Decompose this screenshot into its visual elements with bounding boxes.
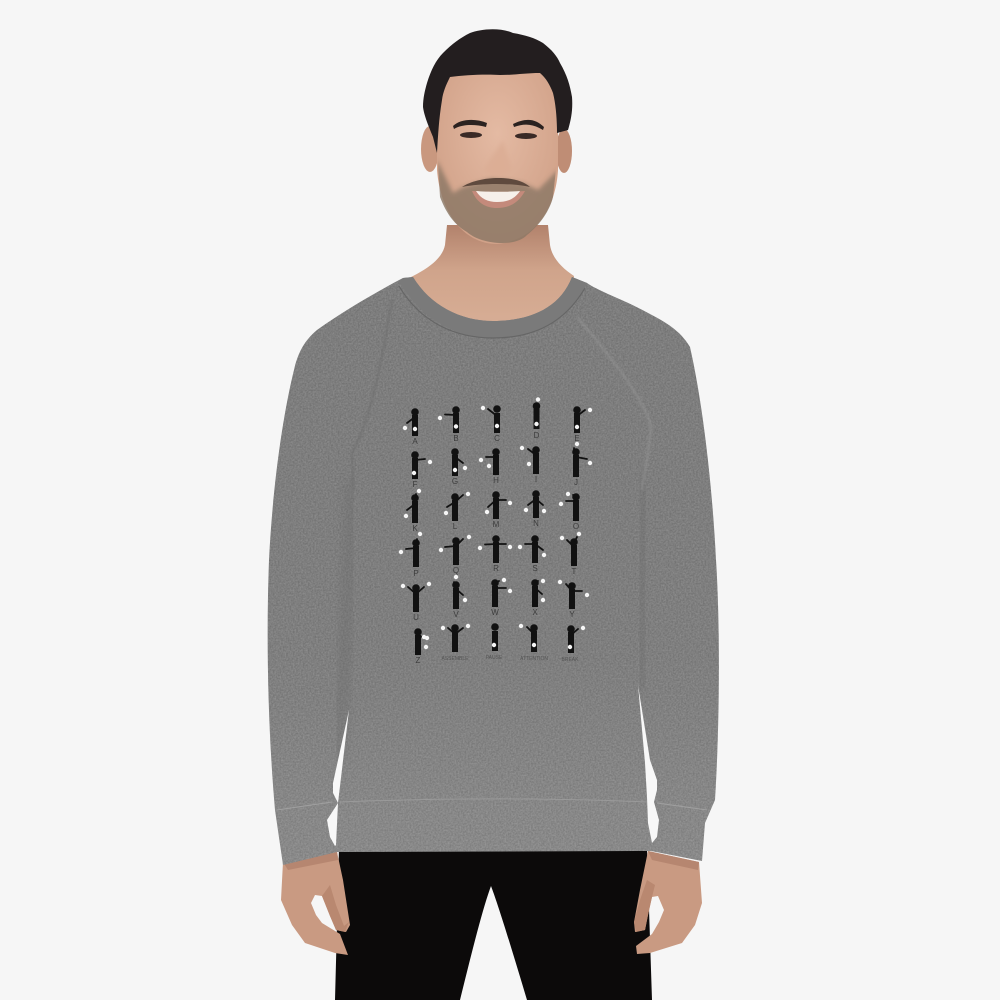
figure O: O: [573, 522, 579, 531]
figure S: S: [532, 564, 538, 573]
face: [437, 60, 558, 244]
semaphore chart: [399, 397, 592, 665]
figure assemble: [441, 624, 470, 662]
hair: [423, 29, 572, 153]
left hand: [281, 852, 350, 955]
neck: [411, 225, 574, 340]
right ear: [556, 129, 572, 173]
figure D: [533, 397, 540, 440]
left sleeve fold shading: [338, 480, 352, 760]
figure F: F: [413, 480, 418, 489]
figure E: E: [574, 434, 580, 443]
figure H: [479, 448, 500, 485]
figure Y: [558, 580, 589, 619]
left eyebrow: [453, 120, 487, 129]
figure Q: Q: [453, 566, 459, 575]
figure S: [518, 535, 546, 573]
left ear: [421, 126, 439, 172]
figure G: [451, 448, 467, 486]
figure N: N: [533, 519, 539, 528]
beard: [438, 161, 556, 243]
figure N: [524, 490, 546, 528]
pants: [335, 848, 652, 1000]
figure H: H: [493, 476, 499, 485]
figure T: T: [572, 567, 577, 576]
figure attention: ATTENTION: [520, 656, 548, 662]
figure R: [478, 535, 512, 573]
raglan seam left: [352, 300, 392, 490]
figure break: [562, 625, 585, 663]
figure D: D: [534, 431, 540, 440]
figure Z: Z: [416, 656, 421, 665]
figure K: K: [412, 524, 418, 533]
sweatshirt body: [268, 277, 719, 865]
figure J: J: [574, 478, 578, 487]
figure attention: [519, 624, 548, 662]
head: [421, 29, 572, 250]
figure I: I: [535, 475, 537, 484]
figure P: P: [413, 569, 419, 578]
figure break: BREAK: [562, 657, 579, 663]
figure P: [399, 532, 422, 578]
figure I: [520, 446, 540, 484]
figure B: B: [453, 434, 459, 443]
lower lip: [472, 191, 525, 208]
right sleeve fold shading: [640, 470, 645, 690]
figure G: G: [452, 477, 458, 486]
figure M: M: [493, 520, 500, 529]
figure V: V: [453, 610, 459, 619]
nose: [484, 140, 512, 176]
right hand: [634, 851, 702, 954]
right eye: [515, 133, 537, 139]
figure assemble: ASSEMBLE: [442, 656, 469, 662]
figure pause: PAUSE: [486, 655, 503, 661]
fabric texture: [260, 265, 730, 870]
left cuff seam: [277, 802, 332, 810]
mustache: [462, 178, 530, 187]
figure pause: [486, 623, 503, 661]
collar seam: [399, 286, 585, 338]
collar ribbing: [399, 277, 587, 338]
figure C: C: [494, 434, 500, 443]
teeth: [476, 191, 520, 202]
figure A: A: [412, 437, 418, 446]
figure V: [452, 575, 467, 619]
figure Y: Y: [569, 610, 575, 619]
figure X: X: [532, 608, 538, 617]
figure U: [401, 582, 431, 622]
hem seam: [340, 799, 648, 802]
figure O: [559, 492, 580, 531]
figure K: [404, 489, 421, 533]
figure B: [438, 406, 460, 443]
raglan seam right: [578, 318, 651, 490]
figure W: [491, 578, 512, 617]
figure X: [531, 579, 545, 617]
figure Z: [414, 628, 429, 665]
figure T: [560, 532, 581, 576]
figure A: [403, 408, 419, 446]
figure J: [572, 442, 592, 487]
figure R: R: [493, 564, 499, 573]
figure C: [481, 405, 501, 443]
sweatshirt: [260, 265, 730, 870]
gap right of torso: [638, 685, 659, 843]
figure W: W: [491, 608, 499, 617]
figure L: L: [453, 522, 458, 531]
figure U: U: [413, 613, 419, 622]
left eye: [460, 132, 482, 138]
right cuff seam: [657, 803, 707, 810]
figure L: [444, 492, 470, 531]
figure M: [485, 491, 512, 529]
figure Q: [439, 535, 471, 575]
gap left of torso: [327, 710, 349, 846]
figure E: [573, 406, 592, 443]
figure F: [411, 451, 432, 489]
right eyebrow: [513, 120, 544, 130]
